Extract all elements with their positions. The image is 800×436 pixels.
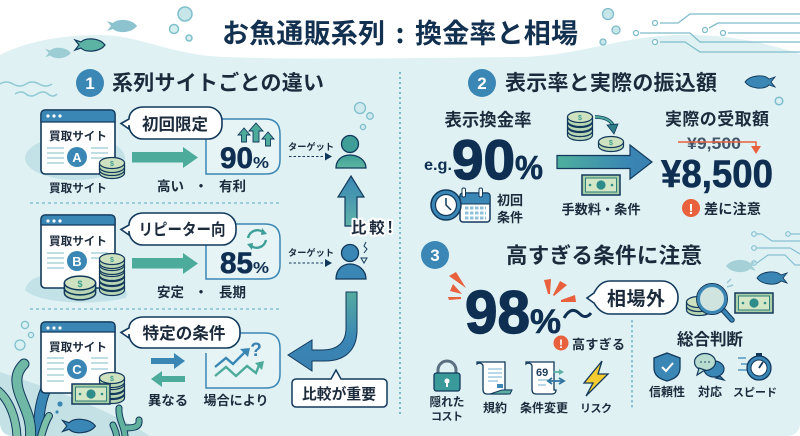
- icon: changed-terms scroll: [526, 362, 564, 394]
- 98 percent value: [465, 279, 591, 346]
- icon: padlock: [434, 361, 460, 391]
- section 1 heading: 系列サイトごとの違い: [112, 67, 324, 97]
- icon: coins with curved arrow: $: [578, 115, 582, 122]
- struck-through amount: ¥9,500: [687, 134, 741, 153]
- title: :: [396, 12, 404, 51]
- row A: label: 買取サイト: [49, 180, 107, 196]
- row A: green arrow: [132, 147, 198, 168]
- decorative vertical divider: [399, 72, 401, 415]
- row B: green arrow: [132, 253, 198, 274]
- row B: speech bubble: リピーター向: [138, 216, 226, 240]
- icon: chat bubbles: [694, 354, 724, 380]
- row A: caption: 高い: [157, 175, 184, 195]
- row C: caption different: 異なる: [148, 390, 188, 409]
- warning: note the difference: !: [688, 201, 694, 218]
- icon: magnifier over coins and banknote: [686, 279, 773, 320]
- row A: site window: 買取サイト: [49, 128, 107, 144]
- row A: person icon: [336, 102, 373, 168]
- actual amount label: 実際の受取額: [665, 105, 769, 130]
- row C: site window: 買取サイト: [49, 339, 107, 355]
- warning rays: [448, 272, 576, 302]
- displayed rate value: e.g.: [424, 157, 452, 174]
- callout: comparison is important: [292, 370, 387, 407]
- row C: chart box: ?: [250, 340, 262, 361]
- row A: result box: [206, 119, 280, 175]
- comparison label: 比較!: [351, 216, 393, 238]
- row A: caption: [157, 175, 246, 195]
- row A: site window: A: [72, 150, 82, 165]
- warning: note the difference: 差に注意: [704, 199, 761, 219]
- row B: result box: %: [253, 260, 269, 277]
- row A: result box: %: [253, 155, 269, 172]
- row B: caption: [157, 281, 246, 301]
- judgement labels: [649, 383, 777, 400]
- 98 percent value: 98: [465, 279, 530, 346]
- speech bubble: off-market: [587, 281, 678, 314]
- row A: target label and dashed arrow: [288, 139, 334, 160]
- title: [222, 12, 578, 51]
- displayed rate value: [424, 128, 543, 191]
- row A: caption: 有利: [219, 175, 246, 195]
- initial condition label: [497, 190, 523, 226]
- row A: speech bubble: [121, 107, 222, 139]
- decorative dashed divider: [631, 320, 633, 408]
- row B: site window: 買取サイト: [49, 233, 107, 249]
- section 1 heading: 1: [85, 74, 95, 93]
- fish: right of section 2: [745, 76, 783, 105]
- row C: site window: $: [110, 376, 114, 383]
- row B: caption: 長期: [219, 281, 246, 301]
- icon: lightning bolt: [584, 361, 608, 396]
- displayed rate value: 90: [452, 128, 515, 191]
- curved down-left arrow: [288, 292, 357, 371]
- overall judgement heading: 総合判断: [677, 326, 743, 350]
- decorative top-left fish and bubbles: [0, 7, 192, 96]
- seaweed and bottom fish: [0, 364, 139, 436]
- row C: site window: [41, 322, 124, 404]
- judgement labels: スピード: [733, 384, 777, 400]
- icon: clock and calendar: [431, 188, 490, 222]
- title: 換金率と相場: [415, 12, 578, 51]
- icon: banknote: [582, 175, 620, 195]
- row B: result box: [206, 224, 280, 280]
- row A: result box: 90: [220, 142, 253, 175]
- section 3 heading: [421, 239, 702, 270]
- row B: site window: B: [72, 254, 82, 269]
- decorative lower-right circuit: [752, 232, 800, 265]
- row C: caption depends: 場合により: [204, 390, 268, 409]
- section 2 heading: 表示率と実際の振込額: [505, 67, 717, 97]
- section 3 heading: 3: [430, 246, 440, 265]
- icon: stopwatch: [738, 353, 771, 380]
- bottom labels: リスク: [580, 400, 612, 416]
- row C: speech bubble: 特定の条件: [142, 320, 226, 344]
- row B: result box: 85: [220, 247, 253, 280]
- callout: comparison is important: 比較が重要: [302, 383, 376, 404]
- row B: site window: $: [110, 257, 114, 264]
- fees and conditions label: 手数料・条件: [562, 199, 640, 218]
- icon: changed-terms scroll: 69: [536, 367, 548, 379]
- bottom labels: コスト: [431, 408, 463, 424]
- row C: chart box: [206, 333, 280, 388]
- warning: too high: !: [559, 337, 563, 351]
- struck-through amount: [678, 134, 761, 154]
- row B: caption: 安定: [157, 281, 184, 301]
- judgement labels: 信頼性: [649, 383, 685, 400]
- icon: shield: [654, 353, 680, 381]
- displayed rate label: 表示換金率: [444, 107, 532, 132]
- icon: coins with curved arrow: [568, 112, 624, 152]
- section 3 heading: 高すぎる条件に注意: [506, 239, 702, 270]
- bottom labels: 条件変更: [520, 399, 568, 416]
- bottom labels: 規約: [483, 399, 507, 416]
- row A: site window: $: [110, 161, 114, 168]
- bottom labels: [430, 393, 612, 424]
- fish: section 3: [726, 260, 787, 284]
- section 2 heading: 2: [477, 74, 487, 93]
- row C: site window: C: [72, 362, 82, 377]
- row C: exchange arrows: [151, 353, 185, 387]
- decorative top-right circuit and bubbles: [600, 8, 800, 52]
- icon: terms scroll: [477, 362, 512, 394]
- row A: target label and dashed arrow: ターゲット: [288, 139, 334, 153]
- row B: person icon: [336, 242, 367, 279]
- row B: caption: ・: [194, 281, 208, 301]
- row B: target label and dashed arrow: [288, 245, 334, 267]
- decorative dashed row divider: [30, 203, 282, 309]
- initial condition label: 条件: [497, 207, 523, 226]
- row A: site window: [25, 110, 125, 180]
- 98 percent value: %: [530, 303, 561, 341]
- up arrow: [338, 176, 364, 226]
- row B: speech bubble: [121, 213, 236, 245]
- row B: site window: $: [77, 279, 83, 289]
- row A: caption: ・: [194, 175, 208, 195]
- warning: too high: 高すぎる: [572, 334, 625, 353]
- row B: target label and dashed arrow: ターゲット: [288, 245, 334, 259]
- sea floor wedge: [0, 372, 150, 436]
- row C: speech bubble: [121, 317, 240, 348]
- speech bubble: off-market: 相場外: [607, 284, 665, 311]
- bottom labels: 隠れた: [430, 393, 464, 410]
- left bubbles: [15, 321, 34, 350]
- initial condition label: 初回: [497, 190, 523, 209]
- title: お魚通販系列: [222, 12, 385, 51]
- actual amount value: ¥8,500: [661, 153, 773, 196]
- displayed rate value: %: [515, 149, 543, 186]
- big gradient arrow: [557, 145, 652, 179]
- row A: speech bubble: 初回限定: [142, 111, 208, 135]
- row B: site window: [25, 215, 127, 303]
- judgement labels: 対応: [698, 383, 722, 400]
- icon: coins with curved arrow: $: [609, 140, 613, 147]
